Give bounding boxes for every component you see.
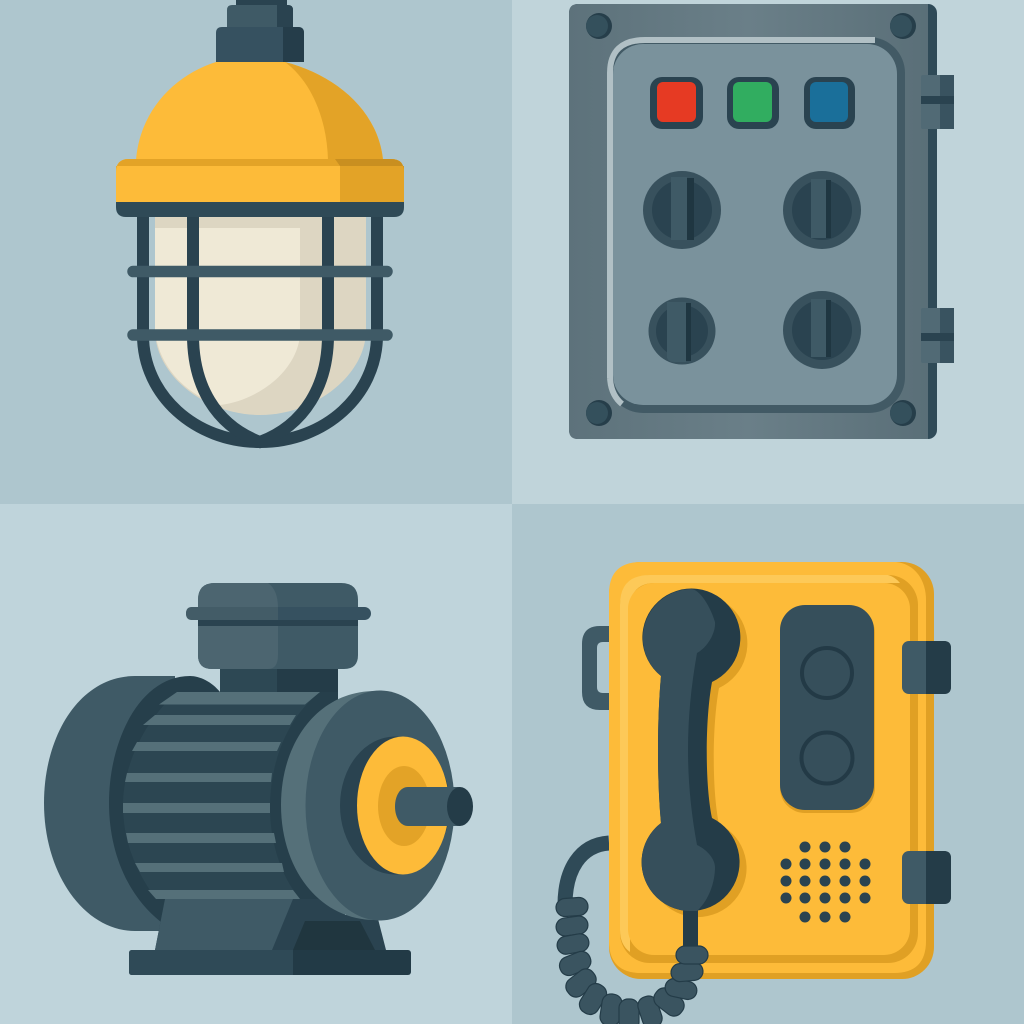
motor foot mount <box>155 899 386 950</box>
handset shadow <box>649 595 747 917</box>
motor base plate <box>129 950 411 975</box>
phone button panel <box>780 605 875 813</box>
phone hinge right lower <box>902 851 951 904</box>
lamp dark collar <box>116 202 404 217</box>
indicator buttons <box>650 77 855 129</box>
rotary switch 2 <box>783 171 861 249</box>
lamp wire cage <box>133 217 387 442</box>
control box face plate <box>607 37 905 413</box>
rotary switch 3 <box>648 298 716 364</box>
panel: electric motor <box>44 583 473 975</box>
rotary switch 4 <box>783 291 861 369</box>
rotary switch 1 <box>643 171 721 249</box>
phone coiled cord <box>555 897 708 1024</box>
panel: control box <box>569 4 954 439</box>
phone side handle <box>582 626 609 710</box>
corner screws <box>586 13 916 426</box>
motor yellow bearing hub <box>340 736 450 874</box>
phone coiled cord upper <box>565 843 609 905</box>
handset cord stem <box>683 905 698 949</box>
motor finned body <box>109 676 338 925</box>
control box enclosure <box>569 4 937 439</box>
telephone handset <box>642 589 740 911</box>
panel: emergency telephone <box>555 562 951 1024</box>
motor terminal box <box>186 583 371 669</box>
motor rear drum <box>44 676 175 931</box>
lamp yellow band <box>116 159 404 202</box>
motor front end bell <box>281 690 454 920</box>
lamp glass globe <box>155 217 366 415</box>
lamp mount connector <box>216 0 304 62</box>
phone hinge right upper <box>902 641 951 694</box>
panel: caged bulkhead lamp <box>116 0 404 442</box>
motor shaft <box>395 787 473 826</box>
lamp yellow dome <box>136 62 383 160</box>
phone speaker grille <box>780 842 870 922</box>
phone yellow housing <box>609 562 934 979</box>
motor cooling fins <box>123 692 320 899</box>
right side door hinges <box>921 75 954 363</box>
motor neck <box>220 665 338 705</box>
